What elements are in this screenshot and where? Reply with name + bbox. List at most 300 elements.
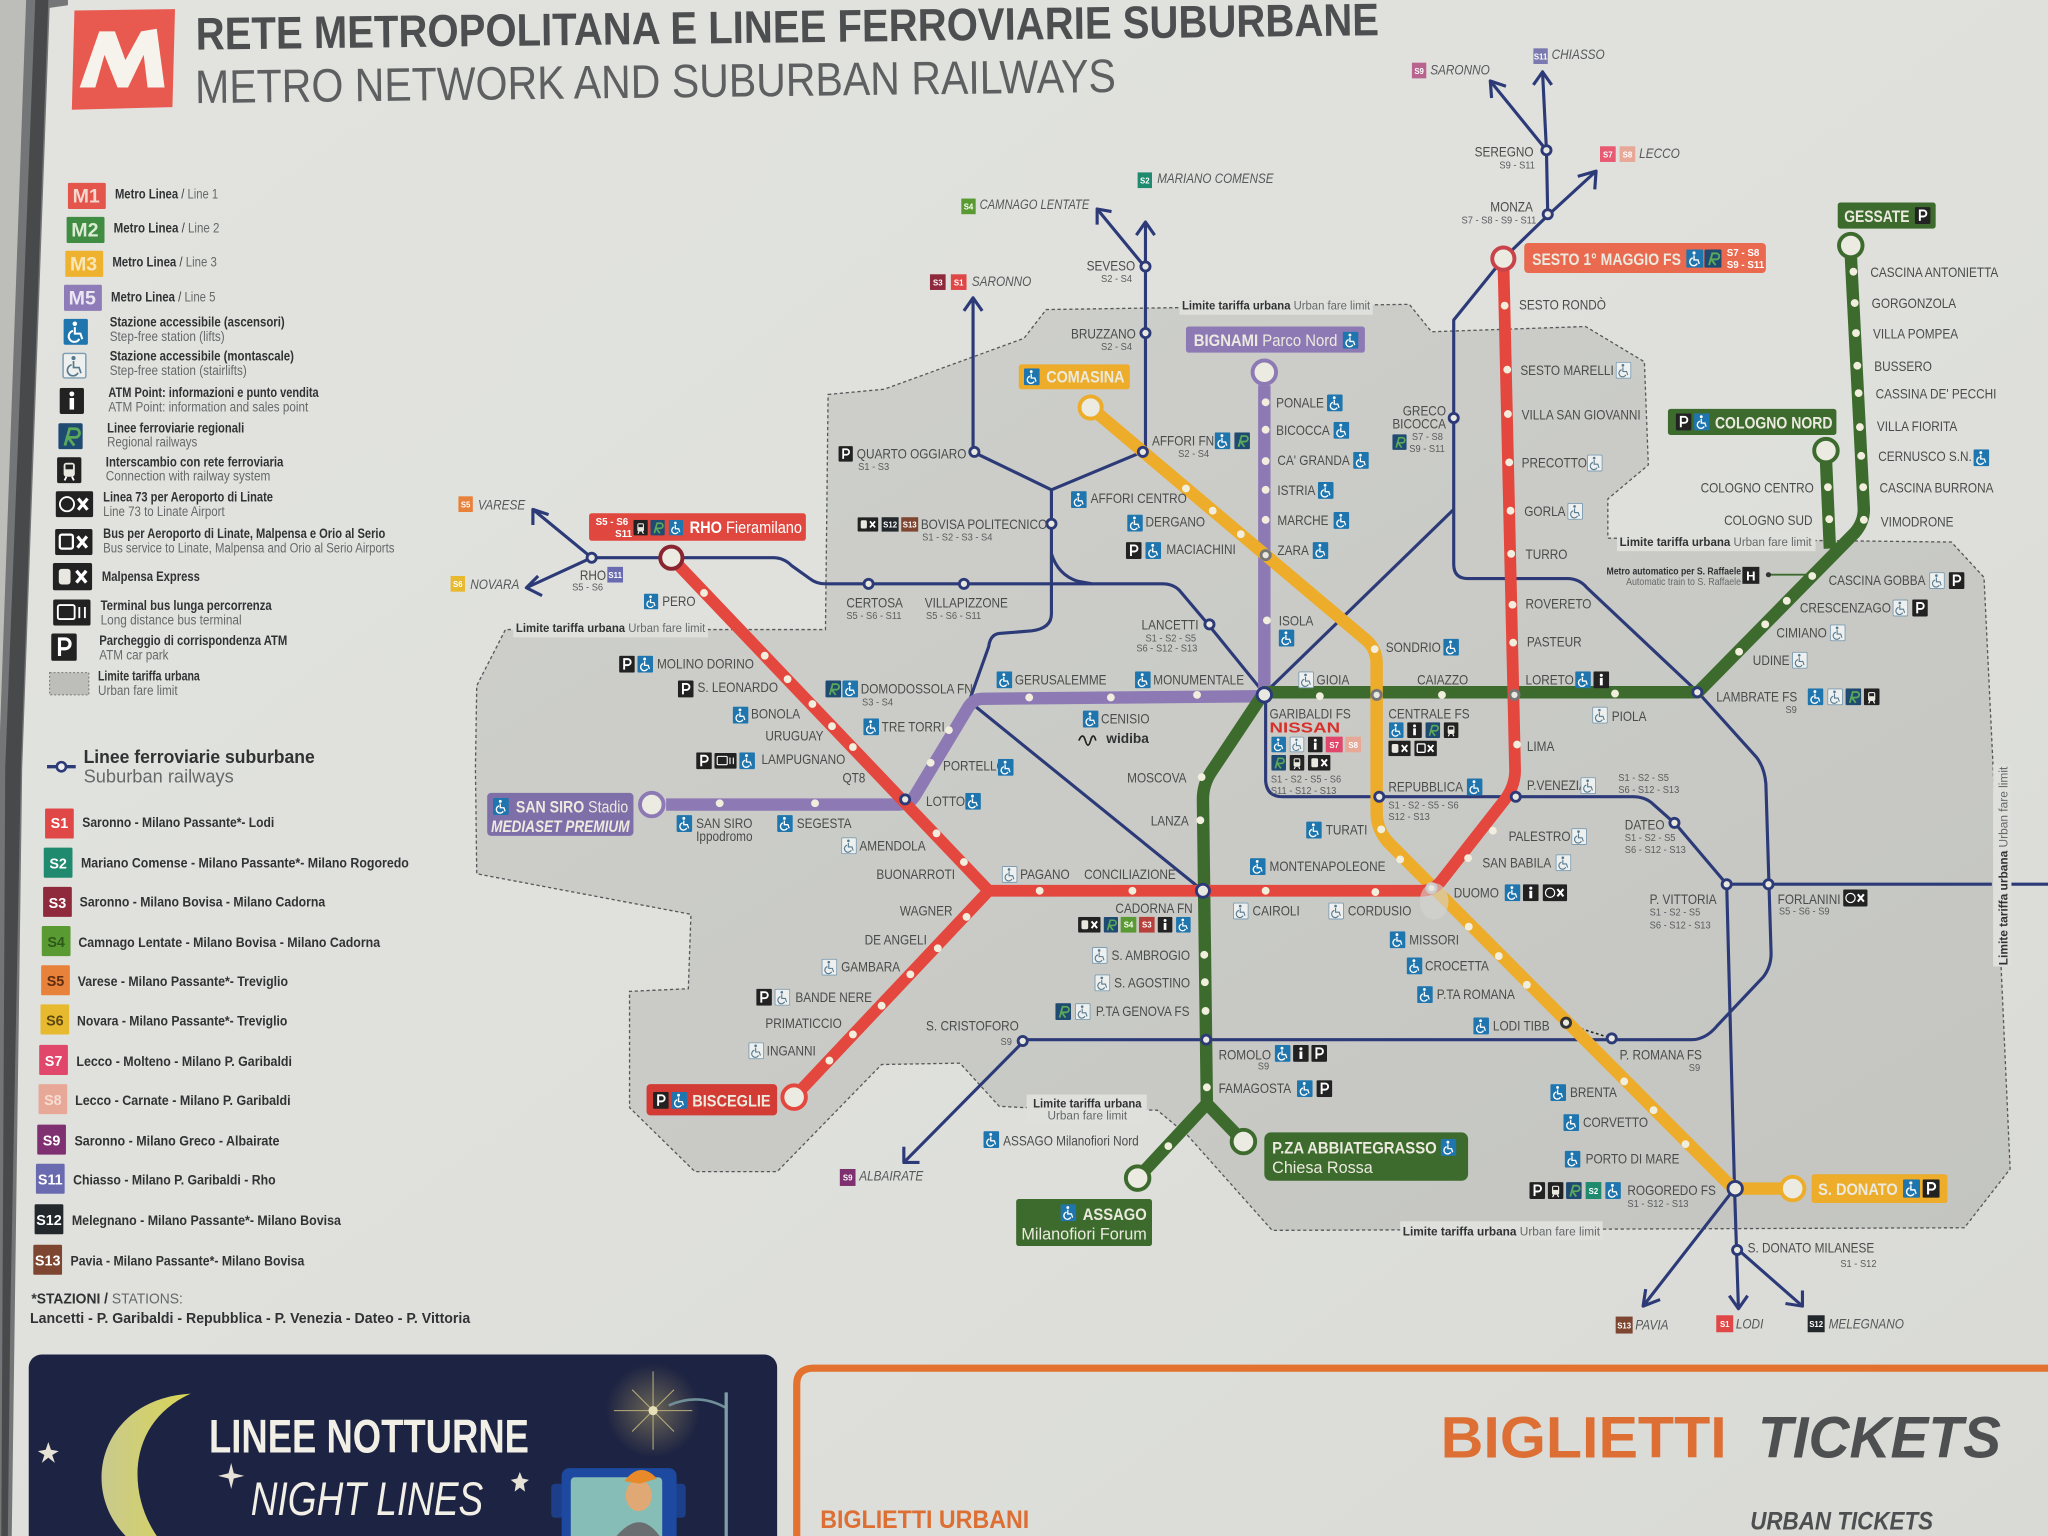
destination labels: S4 <box>964 203 974 212</box>
legend icons and labels: Parcheggio di corrispondenza ATM <box>99 633 287 648</box>
station: Garibaldi FS: S1 - S2 - S5 - S6 <box>1271 774 1341 785</box>
station labels: M2 green line: CADORNA FN <box>1115 900 1193 916</box>
subheading: urban tickets: URBAN TICKETS <box>1750 1508 1933 1535</box>
fare limit labels: Limite tariffa urbana Urban fare limit <box>1403 1225 1601 1239</box>
station labels: M2 green line: COLOGNO SUD <box>1724 512 1812 528</box>
station: Garibaldi FS <box>1270 706 1361 797</box>
map: station dots <box>704 272 1864 1146</box>
station labels: M2 green line: CASCINA GOBBA <box>1829 572 1926 588</box>
station labels: suburban: P. VITTORIA <box>1650 891 1717 907</box>
station labels: M1 red line: INGANNI <box>767 1042 816 1059</box>
suburban line list: S6 <box>46 1013 64 1029</box>
station: Garibaldi FS: NISSAN <box>1270 721 1340 737</box>
metro line chips: M2 <box>71 219 99 241</box>
icon: stars <box>38 1442 529 1492</box>
destination labels: SARONNO <box>1430 62 1490 78</box>
fare limit labels: Limite tariffa urbana Urban fare limit <box>1182 299 1371 313</box>
station labels: M2 green line: LANZA <box>1151 813 1189 829</box>
station labels: suburban: GRECO <box>1403 402 1446 419</box>
legend icons and labels: ATM car park <box>99 648 169 663</box>
station labels: M3 yellow line: P.TA ROMANA <box>1437 986 1515 1002</box>
legend icons and labels: Malpensa Express <box>102 569 200 584</box>
terminus label: San Siro Stadio: MEDIASET PREMIUM <box>491 817 630 836</box>
station labels: M3 yellow line: SONDRIO <box>1386 639 1441 655</box>
station labels: M5 purple line: LOTTO <box>926 793 965 809</box>
station labels: M2 green line: CRESCENZAGO <box>1800 600 1891 616</box>
station labels: M2 green line: FAMAGOSTA <box>1219 1080 1292 1096</box>
legend: suburban railways <box>30 746 471 1327</box>
station labels: suburban: S6 - S12 - S13 <box>1650 920 1711 932</box>
station labels: M3 yellow line: S12 - S13 <box>1388 812 1430 823</box>
station labels: M1 red line: PRECOTTO <box>1522 455 1587 471</box>
fare limit labels <box>513 296 2011 1240</box>
legend icons and labels: Bus service to Linate, Malpensa and Orio al Serio Airports <box>103 540 395 555</box>
station labels: M1 red line: PRIMATICCIO <box>765 1015 842 1031</box>
station labels: M5 purple line: MONUMENTALE <box>1153 672 1244 688</box>
destination labels: S6 <box>453 580 463 589</box>
heading: tickets <box>1441 1406 2001 1471</box>
station labels: M3 yellow line: CROCETTA <box>1425 958 1489 974</box>
fare limit labels: Limite tariffa urbana Urban fare limit <box>1620 535 1812 549</box>
destination labels: S7 <box>1603 150 1613 159</box>
station labels: M3 yellow line: AFFORI FN <box>1152 433 1214 449</box>
station labels: M1 red line: ROVERETO <box>1526 596 1592 612</box>
panel: night lines <box>29 1354 777 1536</box>
suburban heading: Suburban railways <box>84 765 234 786</box>
station labels: M3 yellow line: AFFORI CENTRO <box>1091 490 1187 506</box>
station labels: suburban: S5 - S6 <box>572 582 603 593</box>
station labels: M1 red line: LORETO <box>1526 672 1574 688</box>
station labels: M5 purple line: TRE TORRI <box>882 719 945 735</box>
terminus label: Comasina: COMASINA <box>1046 368 1125 387</box>
suburban line list: S11 <box>38 1173 63 1189</box>
station labels: M5 purple line: SAN SIRO <box>696 815 753 831</box>
station labels: M5 purple line: GERUSALEMME <box>1015 672 1107 688</box>
station labels: M3 yellow line: CORVETTO <box>1583 1114 1648 1130</box>
destination labels: S9 <box>843 1174 853 1183</box>
station labels: suburban: S5 - S6 - S11 <box>926 611 981 622</box>
station labels: M2 green line: P.TA GENOVA FS <box>1096 1003 1190 1019</box>
station labels: M2 green line: GORGONZOLA <box>1872 295 1957 311</box>
station labels: M2 green line: UDINE <box>1753 652 1789 668</box>
destination labels <box>451 46 1904 1334</box>
sponsor: widiba: widiba <box>1105 731 1149 746</box>
station labels: M3 yellow line <box>1071 432 1716 1210</box>
station labels: M5 purple line: Ippodromo <box>696 828 753 844</box>
legend icons and labels: Long distance bus terminal <box>101 612 242 627</box>
station labels: M2 green line: CERNUSCO S.N. <box>1878 448 1972 464</box>
station labels: M1 red line: LAMPUGNANO <box>761 751 845 767</box>
station labels: M3 yellow line: BRENTA <box>1570 1084 1617 1100</box>
legend icons and labels: Connection with railway system <box>106 469 270 484</box>
terminus label: Gessate <box>1838 202 1936 229</box>
station labels: M2 green line: S. AGOSTINO <box>1114 975 1190 991</box>
station labels: suburban: S7 - S8 <box>1412 432 1443 443</box>
legend icons and labels: Step-free station (stairlifts) <box>110 363 247 378</box>
station labels: M1 red line: SESTO RONDÒ <box>1519 297 1606 313</box>
suburban line list: Mariano Comense - Milano Passante*- Milano Rogoredo <box>81 855 409 870</box>
station labels: M3 yellow line: REPUBBLICA <box>1388 779 1464 795</box>
station labels: suburban: S5 - S6 - S9 <box>1779 906 1830 917</box>
title: METRO NETWORK AND SUBURBAN RAILWAYS <box>195 49 1116 113</box>
destination labels: ALBAIRATE <box>858 1168 924 1184</box>
station labels: M1 red line: S. LEONARDO <box>697 679 778 695</box>
station labels: M1 red line: TURRO <box>1526 546 1568 562</box>
map: metro line M3 yellow <box>1091 408 1792 1189</box>
station labels: M1 red line: CAIROLI <box>1253 903 1300 919</box>
station labels: suburban: S11 <box>608 571 623 580</box>
station: Centrale FS <box>1388 706 1470 756</box>
station labels: M2 green line: CASCINA ANTONIETTA <box>1870 264 1999 280</box>
station labels: M2 green line: LAMBRATE FS <box>1716 689 1797 705</box>
suburban line list: S5 <box>47 974 64 990</box>
suburban line list: S8 <box>44 1093 62 1109</box>
terminus label: Sesto 1 Maggio FS: S9 - S11 <box>1727 260 1765 271</box>
legend icons and labels: ATM Point: informazioni e punto vendita <box>108 385 319 400</box>
callout: automatic train: Metro automatico per S. Raffaele <box>1607 567 1742 578</box>
station labels: M3 yellow line: DERGANO <box>1145 514 1205 530</box>
metro line chips: M5 <box>69 287 96 309</box>
suburban line list: Varese - Milano Passante*- Treviglio <box>78 974 288 989</box>
destination labels: LECCO <box>1639 145 1680 161</box>
legend icons and labels: Terminal bus lunga percorrenza <box>101 598 272 613</box>
station labels: M2 green line: CAIAZZO <box>1417 672 1468 688</box>
station labels: M2 green line: VILLA FIORITA <box>1877 418 1958 434</box>
station labels: M1 red line: QT8 <box>842 770 865 786</box>
subheading: urban tickets: BIGLIETTI URBANI <box>820 1507 1029 1534</box>
station: Garibaldi FS: S7 <box>1329 741 1340 750</box>
station labels: M5 purple line: CENISIO <box>1101 711 1150 727</box>
station labels: M1 red line: GAMBARA <box>841 959 901 975</box>
station labels: M5 purple line: MARCHE <box>1277 512 1328 528</box>
station labels: suburban: FORLANINI <box>1778 891 1841 907</box>
board frame <box>0 0 68 1536</box>
terminus label: Assago: Milanofiori Forum <box>1021 1225 1147 1244</box>
metro line chips: Metro Linea / Line 2 <box>114 220 219 235</box>
destination labels: VARESE <box>478 497 526 513</box>
station labels: M1 red line <box>619 297 1679 1059</box>
destination labels: MELEGNANO <box>1829 1315 1904 1332</box>
station labels: M3 yellow line: MISSORI <box>1409 931 1459 948</box>
station labels: M3 yellow line: TURATI <box>1326 822 1367 838</box>
heading: night lines: LINEE NOTTURNE <box>209 1409 529 1462</box>
station labels: M2 green line: COLOGNO CENTRO <box>1701 480 1814 496</box>
callout: automatic train: Automatic train to S. Raffaele <box>1626 577 1741 588</box>
legend icons and labels: Urban fare limit <box>98 683 178 698</box>
map: metro line M1 red <box>671 259 1515 1097</box>
station labels: M1 red line: DUOMO <box>1454 884 1499 901</box>
station labels: M5 purple line: ISOLA <box>1279 613 1314 629</box>
legend icons and labels: Line 73 to Linate Airport <box>103 504 225 519</box>
station labels: M1 red line: S6 - S12 - S13 <box>1618 785 1679 796</box>
station labels: M2 green line: S. AMBROGIO <box>1112 947 1190 963</box>
callout: automatic train <box>1607 567 1808 588</box>
suburban line list <box>33 808 409 1275</box>
metro line chips: M1 <box>73 185 100 207</box>
terminus label: Cologno Nord: COLOGNO NORD <box>1715 413 1832 432</box>
metro line chips: Metro Linea / Line 1 <box>115 187 218 202</box>
station labels: suburban: S12 <box>883 521 898 530</box>
station labels: suburban: LANCETTI <box>1142 617 1199 633</box>
legend icons and labels: Stazione accessibile (montascale) <box>110 348 294 363</box>
suburban line list: S7 <box>45 1054 62 1070</box>
station labels: M1 red line: LIMA <box>1527 738 1555 754</box>
station labels: suburban: S9 <box>1000 1037 1012 1048</box>
legend icons and labels: Bus per Aeroporto di Linate, Malpensa e Orio al Serio <box>103 526 385 541</box>
suburban line list: Saronno - Milano Passante*- Lodi <box>82 815 274 830</box>
legend icons and labels: ATM Point: information and sales point <box>108 399 308 414</box>
station labels: suburban: S1 - S2 - S5 <box>1145 633 1196 644</box>
icon: crescent moon <box>102 1394 191 1536</box>
station labels: M3 yellow line: S1 - S12 - S13 <box>1627 1199 1688 1210</box>
icon: street lamp <box>606 1364 726 1536</box>
terminus label: Assago: ASSAGO <box>1083 1205 1147 1224</box>
station labels: suburban: S1 - S12 <box>1840 1259 1877 1270</box>
suburban line list: S1 <box>51 816 68 832</box>
sponsor: widiba <box>1079 731 1149 746</box>
station labels: suburban: P. ROMANA FS <box>1620 1046 1702 1062</box>
station labels: suburban: SEREGNO <box>1475 144 1534 160</box>
suburban line list: S2 <box>49 857 67 873</box>
station labels: M5 purple line: S3 - S4 <box>862 697 894 708</box>
legend icons and labels: Interscambio con rete ferroviaria <box>106 454 284 469</box>
suburban heading: Linee ferroviarie suburbane <box>84 746 315 767</box>
station labels: suburban: S13 <box>903 521 917 530</box>
station labels: M2 green line: S9 <box>1785 705 1797 716</box>
terminus label: San Siro Stadio <box>487 793 633 836</box>
destination labels: CHIASSO <box>1552 46 1605 62</box>
destination labels: S11 <box>1534 52 1548 61</box>
destination labels: CAMNAGO LENTATE <box>980 197 1090 212</box>
suburban line list: S4 <box>47 935 65 951</box>
station labels: suburban: S1 - S2 - S3 - S4 <box>922 533 993 544</box>
metro line chips: M3 <box>70 253 97 275</box>
station: Garibaldi FS: S11 - S12 - S13 <box>1271 786 1336 797</box>
station labels: M2 green line: MOSCOVA <box>1127 770 1187 786</box>
station labels: suburban: VILLAPIZZONE <box>925 594 1008 611</box>
terminus label: San Donato <box>1812 1174 1947 1203</box>
station labels: M1 red line: VILLA SAN GIOVANNI <box>1522 406 1641 422</box>
destination labels: S2 <box>1140 177 1150 186</box>
fare limit labels: Urban fare limit <box>1048 1108 1128 1122</box>
station labels: suburban: S6 - S12 - S13 <box>1136 644 1197 655</box>
terminus label: Gessate: GESSATE <box>1844 207 1910 226</box>
terminus label: Bignami: BIGNAMI Parco Nord <box>1194 331 1337 350</box>
station labels: M1 red line: SESTO MARELLI <box>1520 362 1614 378</box>
terminus label: Comasina <box>1019 364 1130 389</box>
callout: automatic train: H <box>1746 569 1756 584</box>
terminus label: San Siro Stadio: SAN SIRO Stadio <box>516 797 628 816</box>
station labels: suburban: S2 - S4 <box>1101 342 1133 353</box>
station labels: M1 red line: PERO <box>662 593 696 609</box>
panel: tickets <box>797 1368 2048 1536</box>
terminus label: Bisceglie: BISCEGLIE <box>692 1091 771 1110</box>
legend icons and labels: Stazione accessibile (ascensori) <box>110 315 285 330</box>
station labels: M3 yellow line: MONTENAPOLEONE <box>1270 858 1385 874</box>
legend icons and labels: Linee ferroviarie regionali <box>107 420 244 435</box>
station labels: M1 red line: CONCILIAZIONE <box>1084 866 1176 882</box>
station labels: M3 yellow line: ROGOREDO FS <box>1627 1182 1716 1198</box>
station labels: M5 purple line <box>677 394 1369 844</box>
station labels: suburban: S1 - S2 - S5 <box>1650 907 1700 919</box>
metro line chips: Metro Linea / Line 3 <box>112 254 217 269</box>
legend icons and labels: Regional railways <box>107 435 197 450</box>
map: urban fare zone <box>475 304 2010 1230</box>
station labels: M2 green line: S4 <box>1124 920 1134 929</box>
station labels: M2 green line: S3 <box>1142 920 1152 929</box>
station labels: M2 green line: ROMOLO <box>1219 1046 1271 1062</box>
station labels: M2 green line: S9 <box>1258 1062 1269 1073</box>
station labels: M3 yellow line: S2 <box>1589 1187 1599 1196</box>
legend icons and labels <box>50 315 395 698</box>
station: Garibaldi FS: GARIBALDI FS <box>1270 706 1351 722</box>
destination labels: PAVIA <box>1635 1317 1668 1333</box>
station labels: M5 purple line: ISTRIA <box>1277 482 1316 498</box>
station labels: M1 red line: SAN BABILA <box>1482 854 1552 870</box>
station labels: suburban: S9 - S11 <box>1499 160 1535 172</box>
station labels: M1 red line: CORDUSIO <box>1348 903 1411 919</box>
suburban line list: Saronno - Milano Greco - Albairate <box>74 1133 280 1148</box>
suburban line list: Pavia - Milano Passante*- Milano Bovisa <box>71 1254 305 1269</box>
terminus label: Rho Fieramilano <box>589 513 806 541</box>
station labels: M5 purple line: DOMODOSSOLA FN <box>861 681 973 697</box>
terminus label: Abbiategrasso: Chiesa Rossa <box>1272 1158 1373 1177</box>
station labels: M5 purple line: PONALE <box>1276 395 1324 411</box>
suburban line list: Chiasso - Milano P. Garibaldi - Rho <box>73 1173 276 1188</box>
station labels: M3 yellow line: S2 - S4 <box>1178 449 1210 460</box>
station labels: M3 yellow line: MACIACHINI <box>1166 541 1236 557</box>
station labels: M1 red line: PALESTRO <box>1509 828 1571 844</box>
station labels: M3 yellow line: S1 - S2 - S5 - S6 <box>1388 800 1459 812</box>
destination labels: S12 <box>1809 1320 1824 1329</box>
station labels: M1 red line: AMENDOLA <box>859 837 926 854</box>
map: terminus circles <box>640 234 1863 1200</box>
legend icons and labels: Step-free station (lifts) <box>110 329 225 344</box>
destination labels: LODI <box>1736 1315 1764 1332</box>
terminus label: Cologno Nord <box>1668 409 1836 435</box>
metro line chips: Metro Linea / Line 5 <box>111 290 216 305</box>
terminus label: Bisceglie <box>647 1084 777 1115</box>
station labels: M3 yellow line: LODI TIBB <box>1493 1018 1550 1034</box>
station labels: M1 red line: BUONARROTI <box>876 866 955 882</box>
terminus label: Abbiategrasso: P.ZA ABBIATEGRASSO <box>1272 1138 1437 1157</box>
destination labels: S9 <box>1414 67 1425 76</box>
suburban line list: Camnago Lentate - Milano Bovisa - Milano Cadorna <box>78 935 380 950</box>
terminus label: Abbiategrasso <box>1264 1132 1468 1181</box>
metro line chips <box>64 183 219 311</box>
station labels: M2 green line: CIMIANO <box>1776 625 1827 641</box>
station labels: suburban: S. CRISTOFORO <box>926 1018 1019 1034</box>
station labels: M1 red line: PAGANO <box>1020 866 1070 882</box>
station labels: suburban: BICOCCA <box>1392 416 1446 432</box>
station labels: suburban: S7 - S8 - S9 - S11 <box>1462 215 1536 226</box>
station labels: suburban: S1 - S2 - S5 <box>1625 833 1675 844</box>
fare limit labels: Limite tariffa urbana Urban fare limit <box>1997 766 2011 965</box>
fare limit labels: Limite tariffa urbana Urban fare limit <box>516 621 706 635</box>
station labels: M5 purple line: BICOCCA <box>1276 422 1330 438</box>
station labels: M2 green line: CASSINA DE' PECCHI <box>1876 386 1996 402</box>
terminus label: Assago <box>1016 1199 1152 1246</box>
station labels: M2 green line: GIOIA <box>1317 672 1350 688</box>
station labels: suburban <box>572 144 1877 1270</box>
suburban line list: Saronno - Milano Bovisa - Milano Cadorna <box>80 894 326 909</box>
station labels: suburban: RHO <box>580 567 606 583</box>
destination labels: SARONNO <box>972 273 1031 289</box>
station labels: M2 green line: VILLA POMPEA <box>1873 325 1959 342</box>
station labels: M1 red line: BANDE NERE <box>795 989 872 1005</box>
station labels: M1 red line: BONOLA <box>751 706 801 722</box>
heading: tickets: BIGLIETTI <box>1441 1406 1727 1471</box>
heading: tickets: TICKETS <box>1758 1406 2001 1471</box>
station labels: M3 yellow line: PORTO DI MARE <box>1586 1151 1680 1167</box>
station labels: suburban: S9 <box>1689 1063 1700 1074</box>
suburban heading <box>47 746 315 786</box>
heading: night lines <box>209 1409 529 1525</box>
fare limit labels: Limite tariffa urbana <box>1033 1097 1142 1111</box>
destination labels: MARIANO COMENSE <box>1157 171 1274 186</box>
legend icons and labels: Limite tariffa urbana <box>98 668 200 683</box>
legend icons and labels: Linea 73 per Aeroporto di Linate <box>103 490 273 505</box>
footnote stations <box>30 1291 471 1327</box>
terminus label: Rho Fieramilano: S5 - S6 <box>596 517 629 528</box>
arrowheads <box>526 72 1802 1309</box>
destination labels: S1 <box>954 278 964 287</box>
terminus label: Bignami <box>1186 327 1365 353</box>
terminus label: San Donato: S. DONATO <box>1818 1180 1898 1199</box>
heading: night lines: NIGHT LINES <box>251 1472 483 1525</box>
station labels: suburban: CERTOSA <box>846 594 903 611</box>
station labels: M2 green line: CASCINA BURRONA <box>1880 480 1994 496</box>
suburban line list: S9 <box>43 1133 60 1149</box>
suburban line list: Lecco - Carnate - Milano P. Garibaldi <box>75 1093 291 1108</box>
title <box>194 0 1380 113</box>
station labels: M1 red line: MOLINO DORINO <box>657 656 754 672</box>
station labels: M2 green line: VIMODRONE <box>1881 514 1954 530</box>
terminus label: Rho Fieramilano: S11 <box>615 529 633 540</box>
station labels: suburban: DATEO <box>1625 817 1665 833</box>
station labels: M1 red line: DE ANGELI <box>865 931 927 948</box>
legend: symbols <box>50 183 395 698</box>
suburban line list: S12 <box>36 1213 62 1229</box>
station labels: M5 purple line: SEGESTA <box>797 815 852 831</box>
station labels: M1 red line: P.VENEZIA <box>1527 777 1587 793</box>
station labels: suburban: BRUZZANO <box>1071 325 1136 342</box>
suburban line list: Novara - Milano Passante*- Treviglio <box>77 1013 287 1028</box>
suburban line list: Lecco - Molteno - Milano P. Garibaldi <box>76 1054 292 1069</box>
destination labels: NOVARA <box>470 576 519 592</box>
station labels: M1 red line: WAGNER <box>900 903 953 919</box>
station labels: suburban: QUARTO OGGIARO <box>857 446 966 462</box>
logo: metro M <box>72 9 175 110</box>
destination labels: S8 <box>1623 150 1633 159</box>
station labels: suburban: SEVESO <box>1087 258 1135 274</box>
map: metro line M2 green <box>1138 255 1864 1178</box>
station labels: M2 green line: PIOLA <box>1612 708 1647 724</box>
station labels: suburban: S2 - S4 <box>1101 274 1133 285</box>
station: Centrale FS: CENTRALE FS <box>1388 706 1470 722</box>
destination labels: S13 <box>1617 1321 1632 1330</box>
station labels: M5 purple line: CA' GRANDA <box>1277 452 1350 468</box>
map: metro line M5 purple <box>666 385 1264 805</box>
station labels: M1 red line: PASTEUR <box>1527 634 1582 650</box>
station labels: suburban: S. DONATO MILANESE <box>1748 1240 1874 1256</box>
terminus label: Sesto 1 Maggio FS: SESTO 1° MAGGIO FS <box>1532 250 1681 269</box>
station: Garibaldi FS: S8 <box>1348 741 1359 750</box>
suburban line list: Melegnano - Milano Passante*- Milano Bovisa <box>72 1213 341 1228</box>
destination labels: S1 <box>1720 1320 1730 1329</box>
destination labels: S3 <box>933 278 943 287</box>
smudge on the poster near Duomo <box>1420 883 1448 920</box>
